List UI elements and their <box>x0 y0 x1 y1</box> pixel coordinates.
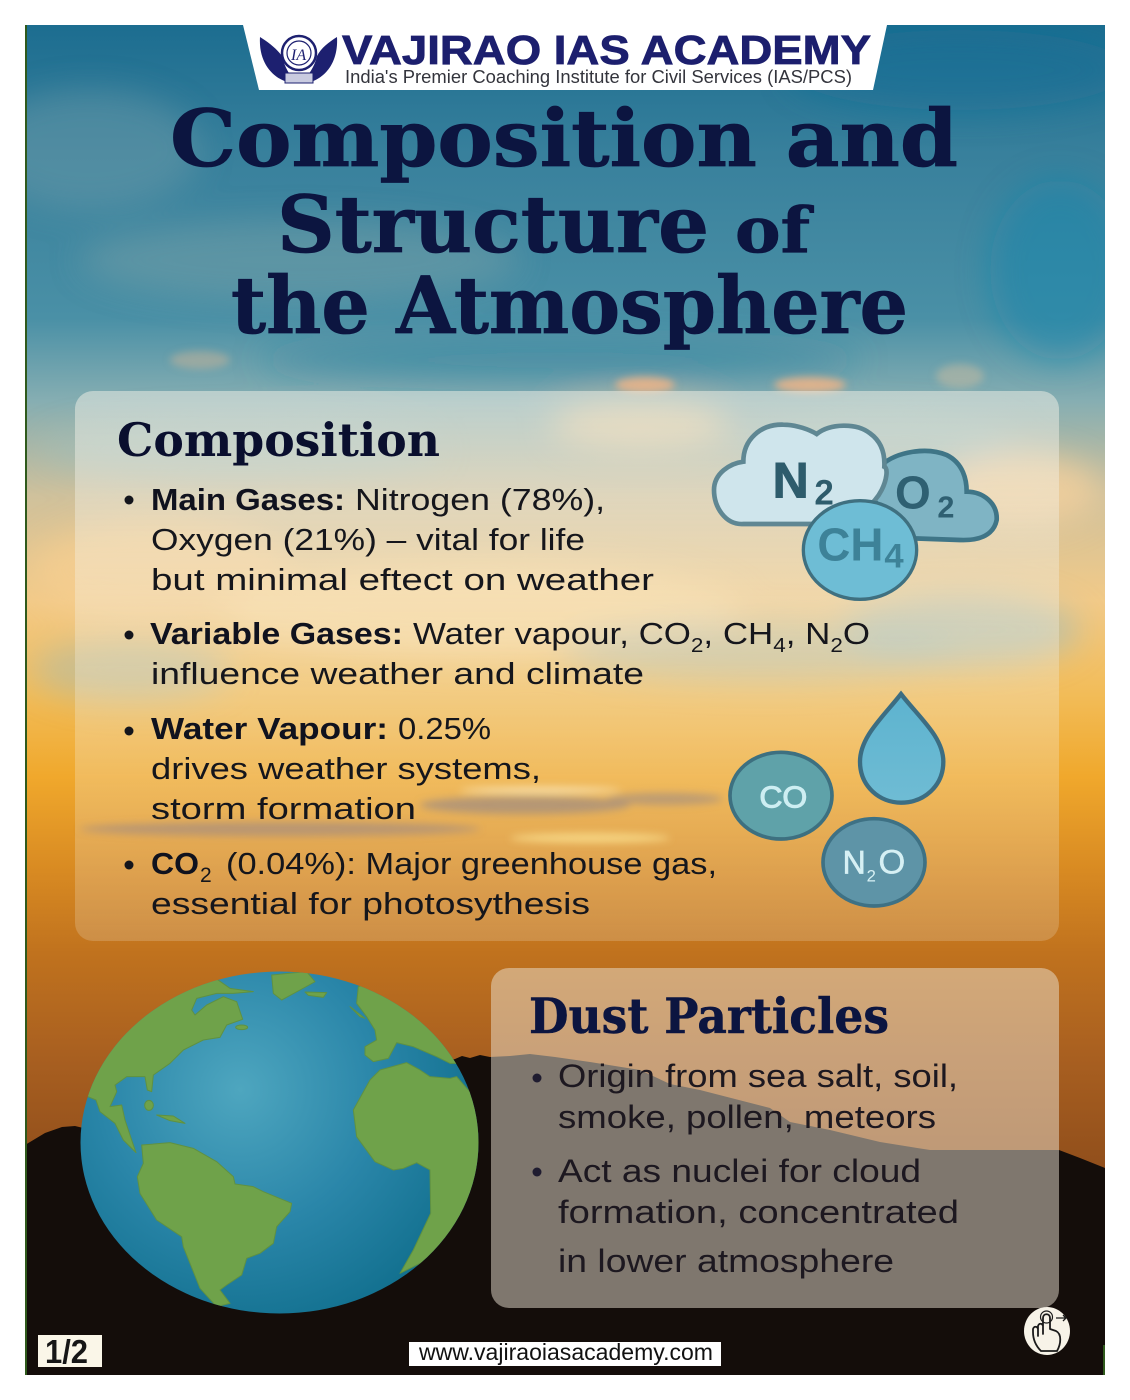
icon: nitrous oxide bubble: N <box>843 845 866 881</box>
bullet: cloud nuclei: formation, concentrated <box>558 1194 959 1230</box>
bullet: variable gases: Variable Gases: <box>150 616 403 651</box>
icon: molecules and water drop <box>730 694 943 906</box>
icon: nitrous oxide bubble <box>823 819 925 906</box>
Europe <box>357 980 460 1063</box>
icon: methane bubble: CH <box>817 519 883 571</box>
academy name: VAJIRAO IAS ACADEMY <box>342 27 871 73</box>
bullet: variable gases: Water vapour, CO <box>413 616 660 651</box>
title: Composition and <box>170 92 958 185</box>
bullet: water vapour: storm formation <box>151 791 416 826</box>
panel: composition <box>75 391 1059 941</box>
mountain silhouette <box>25 1054 1105 1375</box>
bullet: origin: Origin from sea salt, soil, <box>558 1058 958 1094</box>
bullet: main gases: Nitrogen (78%), <box>355 482 605 517</box>
icon: nitrogen cloud: N <box>773 452 809 508</box>
bullet: carbon dioxide <box>124 846 717 921</box>
title: of <box>735 193 814 267</box>
title <box>170 92 958 352</box>
bullet: main gases <box>124 482 654 597</box>
bullet: carbon dioxide: (0.04%): Major greenhouse gas, <box>226 846 717 881</box>
bullet: cloud nuclei: Act as nuclei for cloud <box>558 1153 921 1189</box>
bullet: variable gases: 4 <box>773 635 786 657</box>
icon: carbon monoxide bubble <box>730 752 832 839</box>
bullet: main gases: Main Gases: <box>151 482 345 517</box>
bullet: main gases: but minimal eftect on weather <box>151 562 654 597</box>
icon: oxygen cloud: 2 <box>937 490 954 524</box>
bullet: variable gases: 2 <box>691 635 703 657</box>
icon: methane bubble: 4 <box>884 537 904 575</box>
Greenland <box>272 972 315 1000</box>
icon: water drop <box>860 694 943 803</box>
header banner with logo <box>243 25 887 90</box>
icon: oxygen cloud <box>873 451 997 540</box>
bullet: water vapour: drives weather systems, <box>151 751 541 786</box>
icon: nitrogen cloud: 2 <box>814 473 834 512</box>
icon: gas clouds <box>714 425 997 599</box>
bullet: variable gases: influence weather and climate <box>151 656 644 691</box>
bullet: carbon dioxide: 2 <box>200 864 212 887</box>
bullet: carbon dioxide: essential for photosythesis <box>151 886 590 921</box>
North America <box>80 977 253 1153</box>
icon: methane bubble <box>803 501 917 599</box>
bullet: variable gases: O <box>843 616 870 651</box>
bullet: carbon dioxide: CO <box>151 846 199 881</box>
bullet: variable gases <box>124 616 870 691</box>
heading: dust particles: Dust Particles <box>529 987 889 1045</box>
title: Structure <box>277 178 709 271</box>
Africa <box>353 1063 483 1273</box>
bullet: main gases: Oxygen (21%) – vital for life <box>151 522 585 557</box>
title: the Atmosphere <box>231 259 908 352</box>
bullet: cloud nuclei: in lower atmosphere <box>558 1243 894 1279</box>
bullet: water vapour: 0.25% <box>398 711 491 746</box>
icon: oxygen cloud: O <box>895 467 931 519</box>
South America <box>137 1143 292 1307</box>
website url: www.vajiraoiasacademy.com <box>418 1339 713 1365</box>
page number: 1/2 <box>45 1333 88 1370</box>
bullet: variable gases: , N <box>786 616 830 651</box>
panel: dust particles <box>491 968 1059 1308</box>
bullet: origin: smoke, pollen, meteors <box>558 1099 936 1135</box>
icon: carbon monoxide bubble: CO <box>759 781 807 815</box>
bullet: origin <box>532 1058 958 1135</box>
heading: composition: Composition <box>117 413 440 467</box>
bullet: variable gases: 2 <box>830 635 843 657</box>
bullet: variable gases: , CH <box>703 616 773 651</box>
bullet: cloud nuclei <box>532 1153 959 1279</box>
icon: academy crest logo <box>260 36 337 83</box>
icon: swipe hand <box>1024 1307 1070 1355</box>
academy tagline: India's Premier Coaching Institute for Civil Services (IAS/PCS) <box>345 66 852 87</box>
bullet: water vapour <box>124 711 541 826</box>
icon: nitrous oxide bubble: O <box>878 844 905 882</box>
icon: nitrogen cloud <box>714 425 887 524</box>
icon: nitrous oxide bubble: 2 <box>867 866 876 885</box>
globe <box>80 972 483 1314</box>
bullet: water vapour: Water Vapour: <box>151 711 388 746</box>
icon: academy crest logo: IA <box>290 47 306 64</box>
